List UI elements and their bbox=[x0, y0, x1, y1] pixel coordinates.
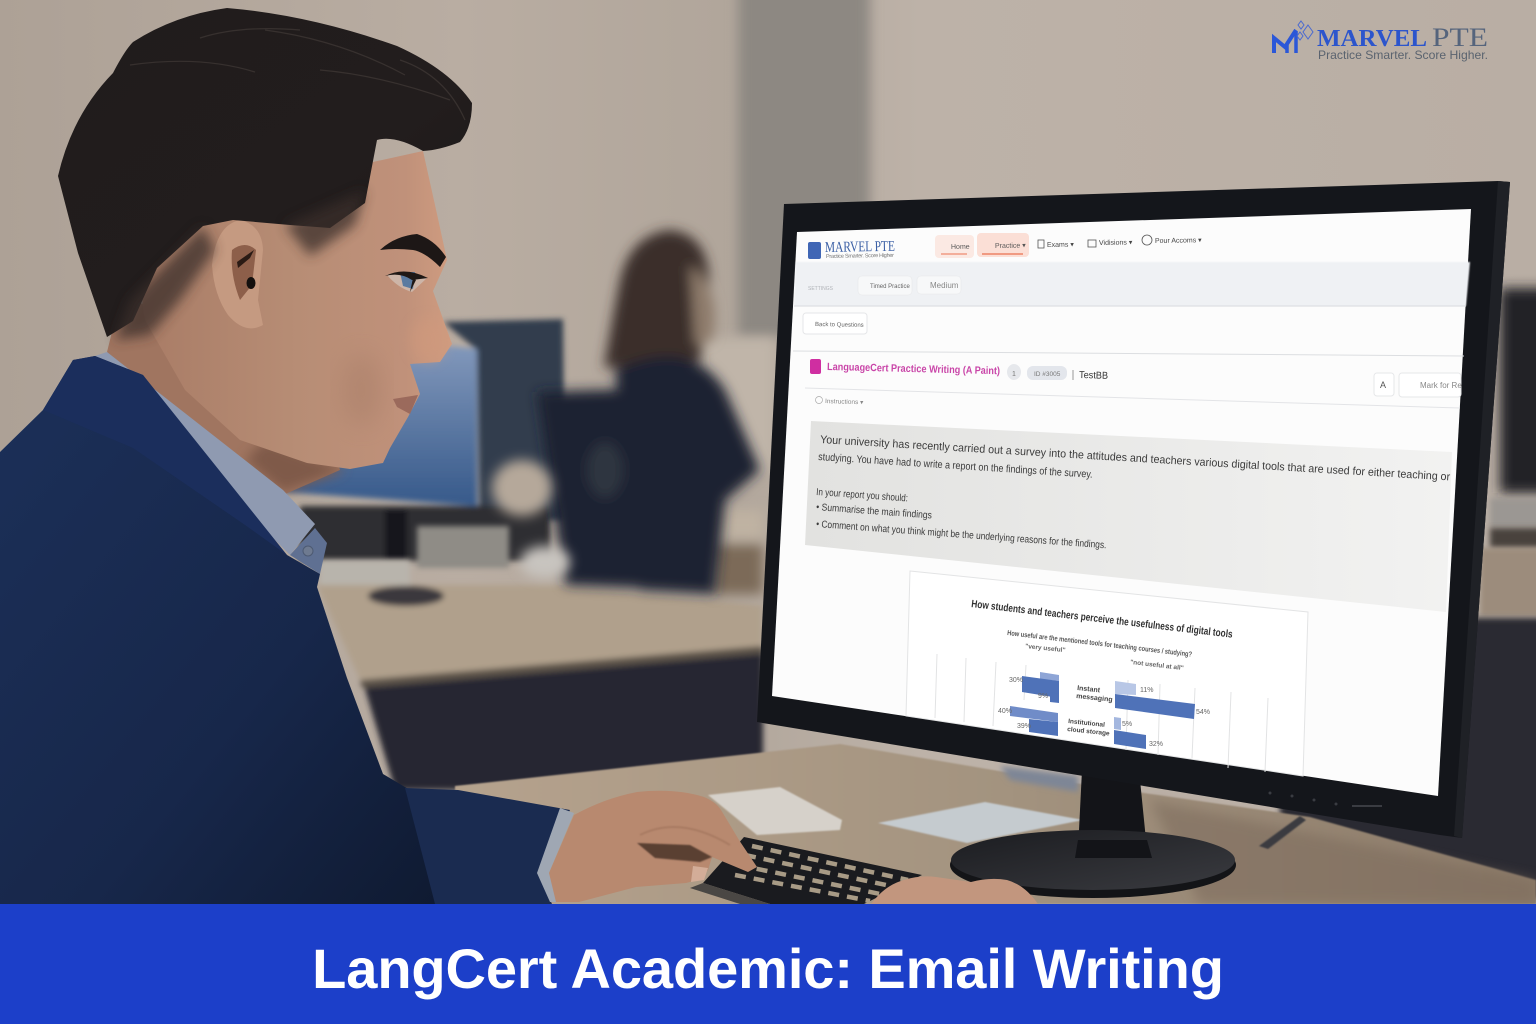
papers on desk bbox=[708, 787, 1083, 843]
screen logo bbox=[808, 239, 895, 260]
keyboard bbox=[690, 837, 922, 904]
eye bbox=[385, 271, 428, 292]
chart: "not useful at all" bbox=[1130, 659, 1184, 672]
suit jacket bbox=[0, 356, 440, 904]
chart values: 39% bbox=[1017, 723, 1031, 730]
ear bbox=[212, 220, 263, 328]
chart: "very useful" bbox=[1025, 643, 1066, 654]
hair fade bbox=[115, 190, 365, 340]
nose highlight bbox=[410, 318, 446, 362]
chart title: How students and teachers perceive the usefulness of digital tools bbox=[971, 598, 1233, 641]
chart values: 32% bbox=[1149, 741, 1163, 748]
neck bbox=[107, 300, 340, 525]
background desk clutter behind chair bbox=[703, 510, 763, 594]
hair strands bbox=[130, 29, 465, 120]
banner title: LangCert Academic: Email Writing bbox=[312, 937, 1224, 1000]
banner title bbox=[0, 904, 1536, 1024]
monitor bbox=[757, 181, 1510, 838]
chart subtitle: How useful are the mentioned tools for teaching courses / studying? bbox=[1007, 628, 1193, 659]
shirt collar bbox=[95, 352, 327, 574]
logo icon bbox=[1274, 21, 1313, 53]
question header: TestBB bbox=[1079, 370, 1108, 382]
person bbox=[0, 8, 1038, 904]
screen settings controls: Timed Practice bbox=[870, 284, 910, 290]
question prompt: Your university has recently carried out a survey into the attitudes and teachers various digital tools that are used for either teaching or bbox=[820, 434, 1451, 483]
chart values: 9% bbox=[1038, 693, 1048, 700]
screen nav: Practice ▾ bbox=[995, 242, 1026, 250]
left hand bbox=[549, 791, 757, 902]
cheek shadow bbox=[342, 354, 382, 426]
question header: ID #3005 bbox=[1034, 371, 1061, 378]
screen nav bbox=[935, 233, 1202, 258]
question header bbox=[810, 359, 1462, 406]
mouth bbox=[393, 395, 418, 414]
suit lapel bbox=[43, 356, 287, 555]
screen settings controls bbox=[808, 276, 961, 295]
monitor bezel bbox=[757, 181, 1510, 838]
chart: cloud storage bbox=[1067, 726, 1110, 737]
logo wordmark: MARVEL bbox=[1317, 26, 1427, 52]
question header: A bbox=[1380, 380, 1386, 390]
question header: LanguageCert Practice Writing (A Paint) bbox=[827, 361, 1000, 377]
question prompt bbox=[816, 434, 1451, 551]
screen logo: MARVEL PTE bbox=[825, 239, 895, 256]
question header: Instructions ▾ bbox=[825, 398, 864, 406]
right side background bbox=[1280, 288, 1536, 898]
desk surface bbox=[455, 744, 1536, 904]
question header: 1 bbox=[1012, 371, 1016, 378]
background colleague and chair bbox=[537, 230, 760, 594]
face bbox=[142, 151, 452, 469]
monitor control buttons bbox=[1268, 792, 1382, 807]
screen nav: Home bbox=[951, 244, 970, 251]
chart: Institutional bbox=[1068, 718, 1105, 729]
right hand on keyboard bbox=[871, 876, 1038, 904]
background desk bbox=[317, 526, 763, 790]
chart values: 40% bbox=[998, 708, 1012, 715]
screen nav: Pour Accoms ▾ bbox=[1155, 237, 1202, 245]
logo tagline: Practice Smarter. Score Higher. bbox=[1318, 48, 1488, 62]
screen nav: Vidisions ▾ bbox=[1099, 239, 1133, 247]
chart values bbox=[998, 677, 1210, 748]
chart values: 30% bbox=[1009, 677, 1023, 684]
screen: settings bar and panels bbox=[793, 262, 1470, 776]
monitor stand bbox=[950, 770, 1236, 898]
screen logo: Practice Smarter. Score Higher bbox=[826, 253, 894, 260]
question prompt: In your report you should: bbox=[816, 487, 908, 504]
question prompt: • Summarise the main findings bbox=[816, 502, 932, 521]
shirt cuff bbox=[537, 808, 574, 902]
chart: messaging bbox=[1076, 693, 1113, 704]
back button: Back to Questions bbox=[815, 322, 864, 329]
pen on desk bbox=[1259, 816, 1306, 849]
back button bbox=[803, 313, 867, 334]
neck shadow under jaw bbox=[245, 440, 345, 492]
suit sleeve bbox=[405, 788, 570, 904]
eyebrow bbox=[380, 234, 446, 267]
chart category labels: Instant bbox=[1077, 685, 1101, 694]
question prompt: • Comment on what you think might be the underlying reasons for the findings. bbox=[816, 519, 1107, 551]
chart values: 11% bbox=[1140, 687, 1154, 694]
screen settings controls: Medium bbox=[930, 281, 959, 290]
background monitor bbox=[285, 319, 565, 561]
question header: Mark for Re bbox=[1420, 381, 1462, 390]
chart gridlines bbox=[935, 654, 1268, 772]
logo: Marvel PTE: PTE bbox=[1432, 23, 1488, 52]
hair bbox=[58, 8, 472, 337]
chart values: 54% bbox=[1196, 709, 1210, 716]
monitor screen bbox=[772, 209, 1471, 796]
logo: Marvel PTE bbox=[1274, 21, 1488, 62]
chart bbox=[935, 598, 1268, 772]
screen settings controls: SETTINGS bbox=[808, 286, 834, 292]
background desk blobs bbox=[492, 460, 570, 578]
chart bars bbox=[1040, 672, 1059, 681]
question prompt: studying. You have had to write a report on the findings of the survey. bbox=[818, 451, 1093, 481]
screen nav: Exams ▾ bbox=[1047, 242, 1074, 249]
chart values: 5% bbox=[1122, 721, 1132, 728]
